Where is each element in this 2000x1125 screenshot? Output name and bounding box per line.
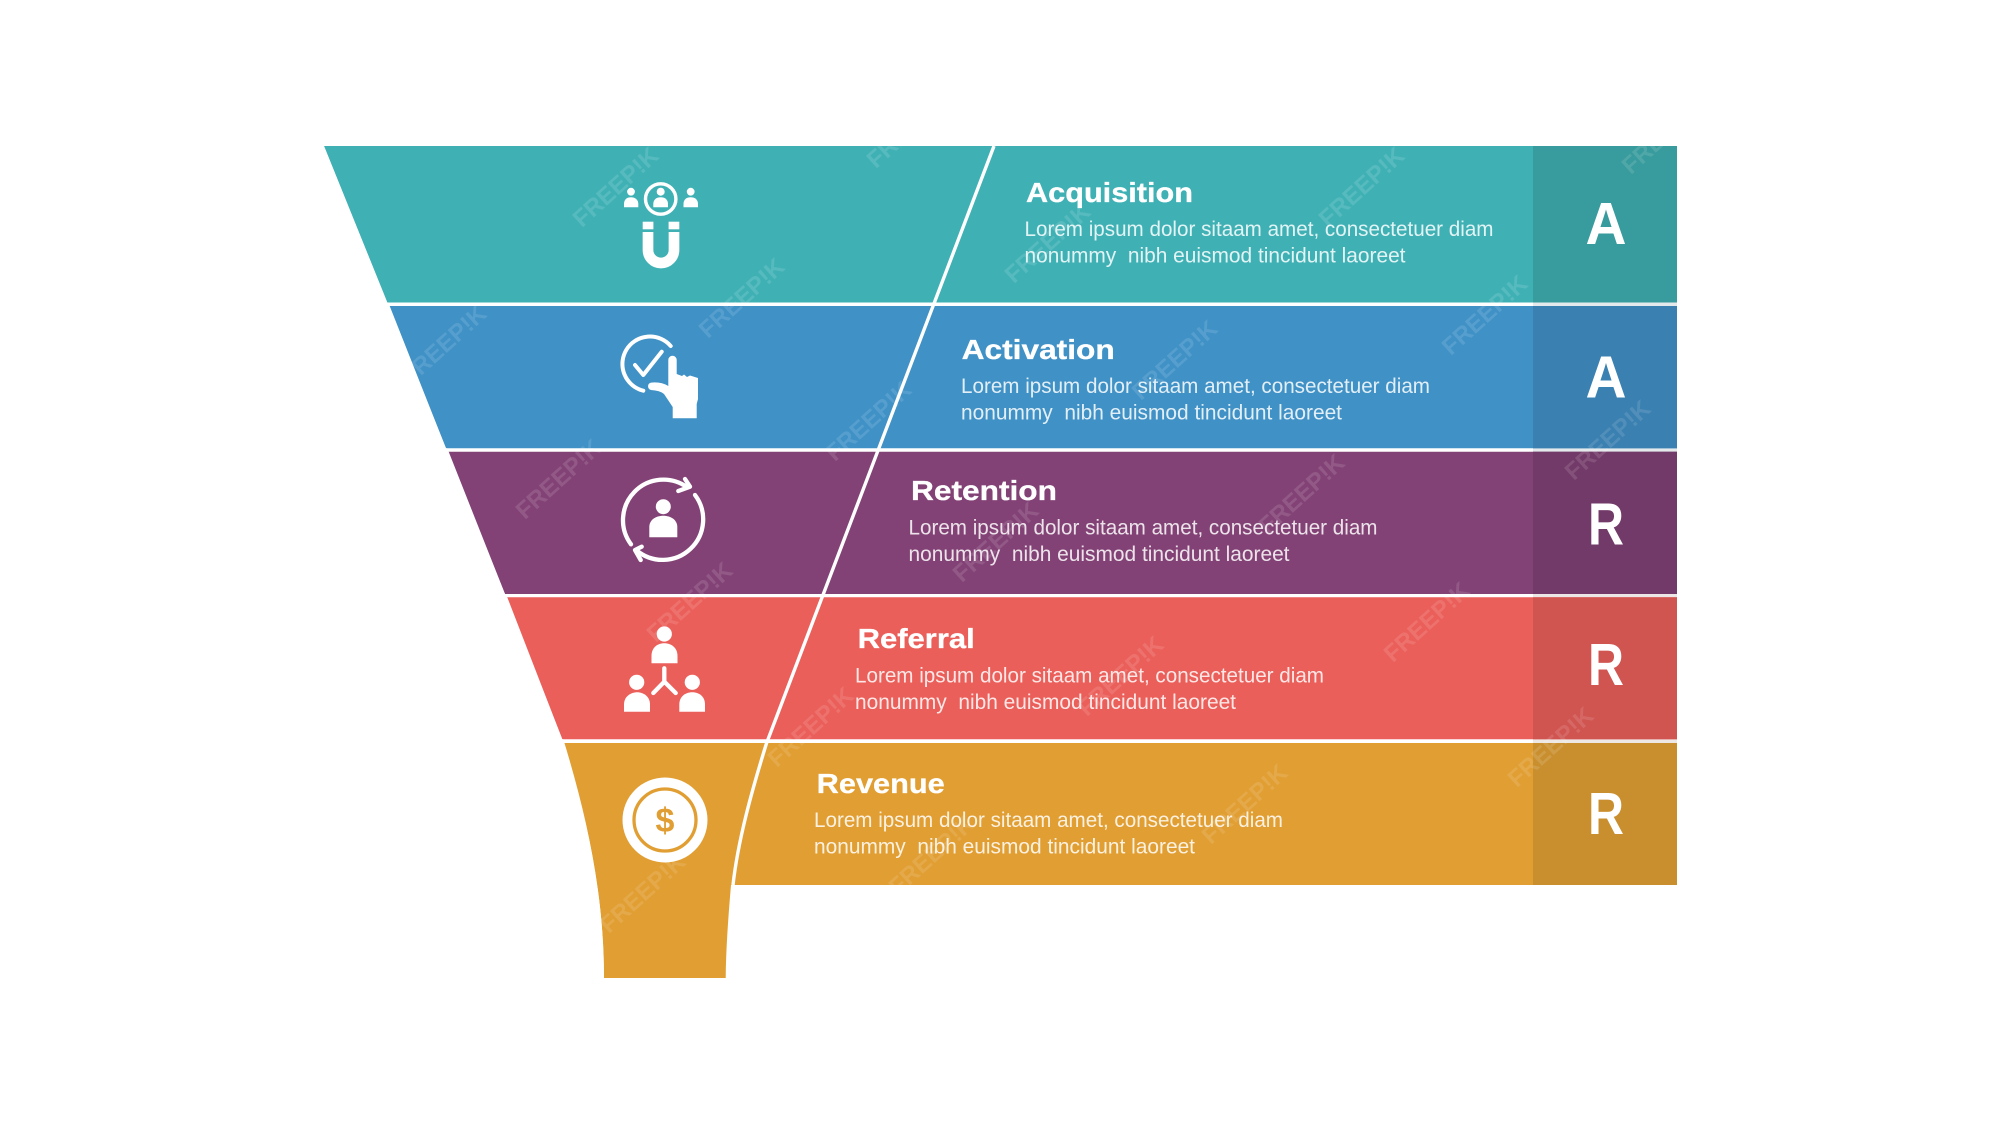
band: referral [506, 597, 1677, 739]
watermark clipped fragments: FREEP!K [253, 185, 350, 276]
letter: R: R [1588, 492, 1624, 558]
watermark overlay: FREEP!K [1197, 759, 1294, 850]
heading: revenue: Revenue [817, 768, 945, 799]
panel: activation [388, 306, 1677, 448]
icon: dollar coin: $ [656, 802, 675, 840]
panel: revenue [563, 743, 1677, 978]
watermark overlay: FREEP!K [884, 810, 981, 901]
watermark overlay: FREEP!K [1379, 577, 1476, 668]
icon: referral network of people [624, 626, 705, 712]
funnel divider line [733, 146, 994, 885]
watermark overlay: FREEP!K [1000, 198, 1097, 289]
watermark overlay: FREEP!K [1073, 631, 1170, 722]
heading: retention: Retention [911, 475, 1057, 506]
watermark overlay: FREEP!K [694, 253, 791, 344]
band: activation [388, 306, 1677, 448]
text block: revenue: Lorem ipsum dolor sitaam amet, consectetuer diam [814, 809, 1283, 832]
text block: retention [908, 516, 1378, 566]
panel: referral [506, 597, 1677, 739]
text block: activation: Lorem ipsum dolor sitaam amet, consectetuer diam [961, 375, 1430, 398]
watermark overlay: FREEP!K [1560, 395, 1657, 486]
letter: R: R [1588, 781, 1624, 847]
heading: referral: Referral [858, 623, 975, 654]
letter: R: R [1588, 632, 1624, 698]
watermark overlay: FREEP!K [1437, 270, 1534, 361]
letter column: acquisition [1533, 146, 1677, 302]
watermark overlay: FREEP!K [1314, 142, 1411, 233]
watermark overlay: FREEP!K [1503, 702, 1600, 793]
text block: retention: nonummy nibh euismod tincidunt laoreet [908, 543, 1290, 566]
watermark overlay: FREEP!K [1127, 315, 1224, 406]
panel: acquisition [324, 146, 1677, 302]
watermark clipped fragments: FREEP!K [862, 83, 959, 174]
watermark overlay: FREEP!K [1254, 449, 1351, 540]
icon: hand tapping a check mark [622, 337, 698, 418]
band and funnel spout: revenue [563, 743, 1677, 978]
letter: A: A [1586, 344, 1626, 410]
text block: acquisition: Lorem ipsum dolor sitaam amet, consectetuer diam [1024, 218, 1494, 241]
heading: acquisition: Acquisition [1026, 177, 1193, 208]
text block: referral: nonummy nibh euismod tincidunt laoreet [855, 691, 1236, 714]
panel: retention [447, 452, 1677, 594]
watermark overlay: FREEP!K [511, 434, 608, 525]
letter column: activation [1533, 306, 1677, 448]
text block: acquisition [1024, 218, 1494, 268]
watermark overlay: FREEP!K [763, 682, 860, 773]
watermark clipped fragments: FREEP!K [1617, 89, 1714, 180]
text block: revenue [814, 809, 1283, 858]
watermark overlay: FREEP!K [642, 557, 739, 648]
text block: acquisition: nonummy nibh euismod tincidunt laoreet [1024, 245, 1406, 268]
watermark overlay: FREEP!K [821, 376, 918, 467]
icon: person in retention cycle [623, 479, 703, 560]
letter column: revenue [1533, 743, 1677, 885]
watermark overlay [396, 142, 1657, 939]
letter column: retention [1533, 452, 1677, 594]
heading: activation: Activation [962, 334, 1115, 365]
text block: activation: nonummy nibh euismod tincidunt laoreet [961, 402, 1342, 425]
watermark clipped fragments [253, 83, 1714, 276]
watermark overlay: FREEP!K [595, 848, 692, 939]
text block: retention: Lorem ipsum dolor sitaam amet, consectetuer diam [908, 516, 1378, 540]
letter column: referral [1533, 597, 1677, 739]
icon: dollar coin [622, 778, 708, 862]
watermark overlay: FREEP!K [948, 497, 1045, 588]
text block: referral [855, 664, 1324, 714]
watermark overlay: FREEP!K [396, 300, 493, 391]
text block: referral: Lorem ipsum dolor sitaam amet, consectetuer diam [855, 664, 1324, 688]
band: retention [447, 452, 1677, 594]
letter: A: A [1586, 191, 1626, 257]
text block: activation [961, 375, 1430, 425]
band: acquisition [324, 146, 1677, 302]
watermark overlay: FREEP!K [568, 142, 665, 233]
icon: magnet attracting people [624, 184, 698, 263]
text block: revenue: nonummy nibh euismod tincidunt laoreet [814, 836, 1195, 858]
